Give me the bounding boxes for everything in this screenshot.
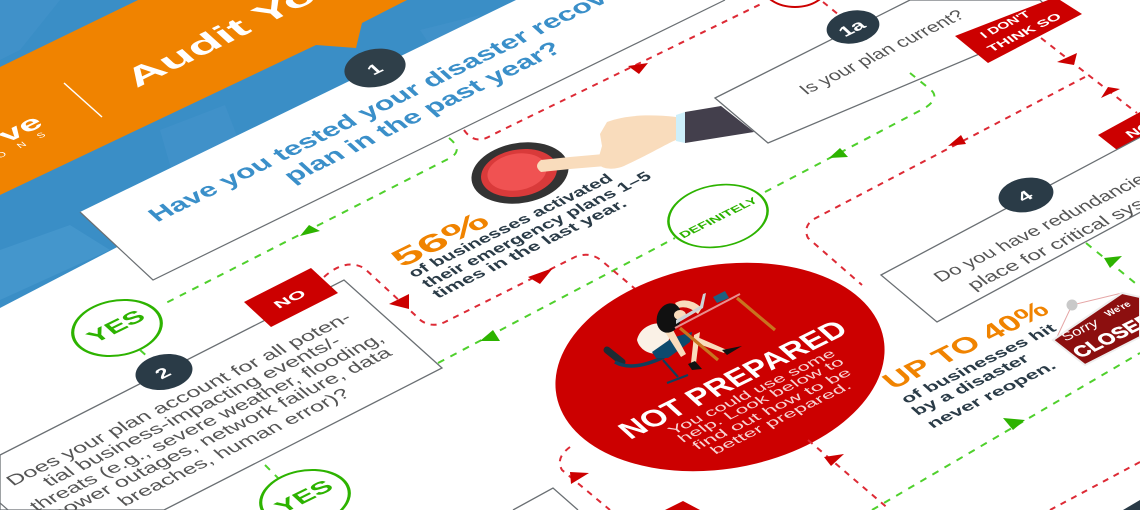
not prepared red circle — [493, 220, 947, 510]
NO tag: NO — [270, 287, 310, 311]
corner of next box — [0, 503, 8, 510]
red connector from box 1a to box 1 — [464, 3, 763, 139]
tag: I don't think so: I DON'T — [977, 9, 1033, 40]
YES badge 1 — [56, 288, 178, 368]
illustration: stressed woman at desk — [607, 291, 775, 383]
orange title banner — [0, 0, 407, 195]
stat text: their emergency plans 1–5 — [417, 169, 655, 290]
icon: red button — [453, 130, 587, 216]
NO tag right — [1098, 112, 1140, 157]
question box 2 — [0, 280, 442, 510]
DEFINITELY badge — [650, 172, 786, 260]
tag: I don't think so: THINK SO — [984, 11, 1064, 54]
stat: up to 40% — [875, 296, 1060, 431]
red connector from tags to not prepared — [806, 38, 1137, 285]
number badge 2: 2 — [151, 365, 176, 383]
stat text: of businesses activated — [404, 171, 617, 280]
red connector to badge 1a — [823, 2, 839, 15]
green connector YES to 2 — [140, 350, 149, 358]
not prepared text: You could use some — [665, 347, 839, 437]
blue header background — [0, 0, 530, 308]
not prepared text: help. Look below to — [675, 356, 848, 445]
question 2 text: tial business-impacting events/- — [39, 333, 346, 490]
question box 4 — [881, 132, 1140, 322]
icon: hand and sleeve — [537, 106, 754, 172]
number badge 4: 4 — [1013, 188, 1038, 206]
question 2 text: threats (e.g., severe weather, flooding, — [26, 331, 389, 510]
red connector below not prepared — [808, 440, 890, 510]
green connector lower right — [872, 353, 1140, 510]
number badge 1 — [333, 41, 417, 95]
green connector to DEFINITELY — [438, 238, 675, 363]
not prepared text: better prepared. — [707, 380, 855, 457]
red connector from NO to not prepared — [324, 255, 640, 325]
NO tag — [244, 268, 338, 327]
question box 1 — [80, 0, 725, 280]
not prepared text: find out how to be — [689, 366, 855, 452]
stat text: never reopen. — [923, 358, 1060, 431]
green connector from box 4 — [1086, 243, 1140, 287]
DEFINITELY badge: DEFINITELY — [676, 195, 761, 240]
icon: sorry we're closed sign: Sorry — [1058, 317, 1104, 344]
stat: 56%: 56% — [384, 207, 497, 273]
not prepared text — [665, 347, 855, 457]
YES badge 2 — [244, 458, 366, 510]
number badge 1: 1 — [363, 61, 388, 79]
icon: sorry we're closed sign — [1053, 293, 1140, 365]
red oval at top — [763, 0, 827, 7]
red connector lower right — [1050, 462, 1140, 510]
YES badge 1: YES — [82, 306, 151, 347]
number badge 4 — [988, 170, 1064, 220]
stat text: of businesses hit — [897, 321, 1060, 406]
stat: 56% — [384, 169, 655, 301]
stat text: by a disaster — [907, 351, 1033, 418]
tag: I don't think so — [955, 0, 1082, 63]
question 2 text: breaches, human error)? — [114, 386, 355, 510]
number badge 1a: 1a — [834, 17, 870, 40]
green connector from DEFINITELY to box 1a — [765, 73, 934, 192]
question 1 text: plan in the past year? — [277, 37, 567, 187]
question 2 text: Does your plan account for all poten- — [2, 310, 356, 489]
dark badge at bottom right — [1123, 500, 1140, 510]
box at bottom edge — [513, 488, 578, 510]
illustration: hand pressing button — [453, 106, 754, 216]
stat: up to 40%: UP TO 40% — [875, 296, 1055, 394]
green connector from box 1 to YES — [162, 138, 457, 305]
question box 1a — [715, 0, 1060, 143]
number badge 2 — [125, 347, 203, 397]
red connector lower left of not prepared — [560, 447, 610, 510]
red tag at bottom edge — [665, 501, 700, 510]
green connector to YES 2 — [265, 465, 280, 480]
number badge 1a — [817, 3, 889, 51]
stat text: times in the last year. — [428, 196, 631, 301]
not prepared heading: NOT PREPARED — [612, 316, 855, 444]
